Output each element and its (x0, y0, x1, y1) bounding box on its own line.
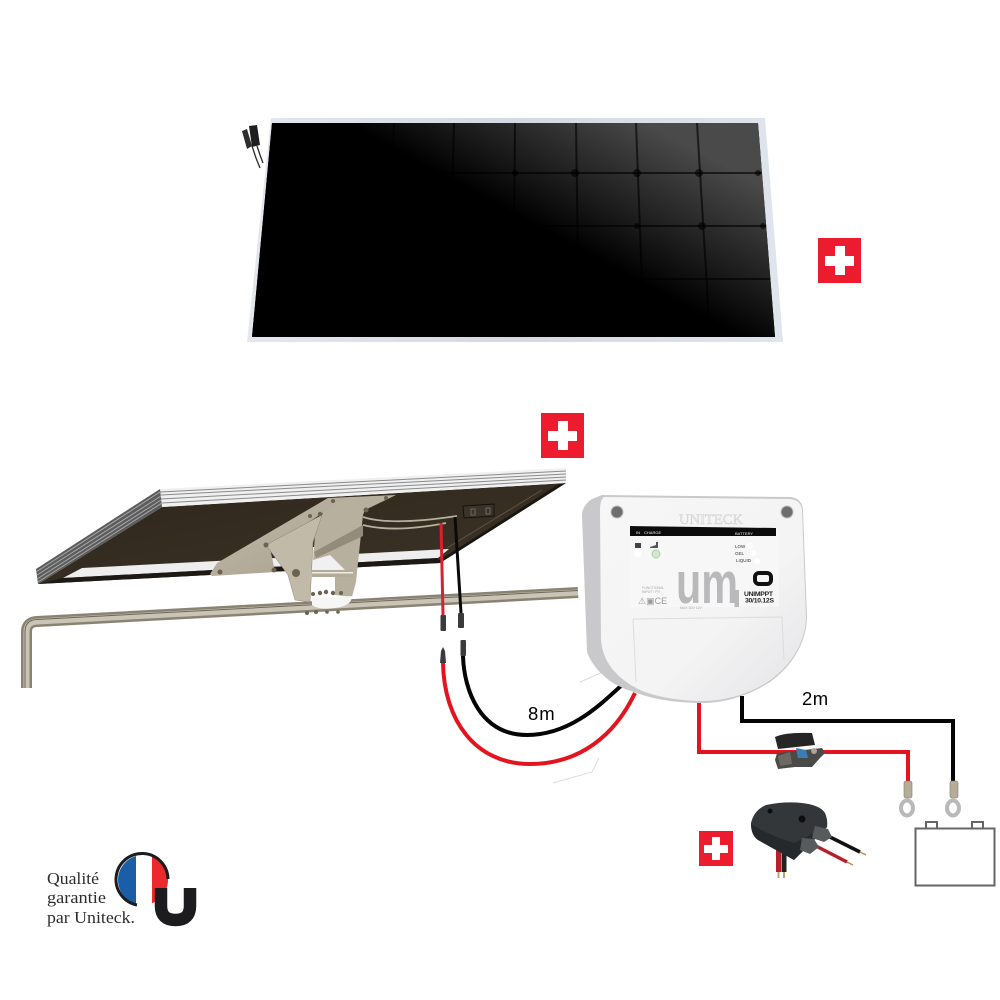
mounting rail (25, 590, 578, 688)
sensor wires, bottom (778, 850, 784, 878)
panel glass (252, 123, 775, 337)
French flag circle and U logo (116, 853, 190, 920)
sensor holes (768, 808, 806, 822)
battery type labels: GEL (735, 551, 745, 556)
sensor lower face (751, 824, 827, 860)
black battery cable (742, 696, 953, 781)
lower red cable (443, 663, 635, 764)
product name (744, 591, 774, 604)
ring terminals (901, 781, 959, 816)
lower connectors (440, 640, 466, 663)
um logo: um (676, 551, 738, 616)
inner frame line (447, 490, 542, 548)
striped side frame (36, 489, 162, 584)
Swiss cross badge: sensor (699, 831, 733, 866)
mounted panel, rear view with bracket and rail (25, 468, 578, 688)
panel rear face (38, 483, 566, 584)
8m label: 8m (528, 703, 556, 724)
red terminal (901, 781, 913, 816)
device small print: INPUT / PV (642, 590, 661, 594)
faint sketch lines (553, 672, 603, 783)
controller face (600, 497, 806, 701)
lower black cable (463, 656, 623, 735)
quality caption: par Uniteck. (47, 908, 135, 927)
battery type labels (735, 544, 752, 563)
brand name: UNITECK (679, 512, 743, 528)
quality caption: garantie (47, 888, 106, 907)
upper red wire (441, 523, 443, 615)
temperature sensor with wires (751, 802, 866, 878)
red battery cable (699, 703, 908, 781)
battery cables (699, 688, 953, 781)
product name: UNIMPPT (744, 591, 774, 598)
bracket right plate (313, 495, 396, 597)
band captions: IN (636, 530, 640, 535)
device small print: ⚠▣CE (638, 596, 667, 606)
product name: 30/10.12S (745, 598, 774, 604)
upper connectors (440, 613, 464, 631)
controller body (582, 495, 807, 703)
panel cell grid (394, 123, 770, 292)
white strip under panel (63, 549, 449, 578)
solar panel, front view (247, 118, 783, 342)
cable glands (800, 826, 832, 854)
inline fuse holder (775, 733, 825, 769)
2m label: 2m (802, 688, 829, 709)
black status band (630, 526, 776, 536)
panel wires (363, 516, 457, 529)
band captions: CHARGE (644, 530, 661, 535)
cell corner dots (512, 169, 766, 230)
band captions: BATTERY (735, 531, 753, 536)
device small print (638, 586, 703, 610)
upper black wire (455, 517, 461, 613)
rail clamp (312, 596, 352, 609)
junction box (463, 504, 494, 518)
quality caption (47, 869, 135, 927)
battery type labels: LOW (735, 544, 746, 549)
cover lid (633, 617, 784, 682)
product icon (755, 573, 771, 584)
quality label (47, 853, 190, 927)
panel right edge shadow (435, 483, 566, 563)
mounting holes (611, 506, 793, 518)
bracket diagonal shade (314, 525, 363, 558)
Swiss cross badge: panel (818, 238, 861, 283)
sensor wires, side (816, 837, 866, 865)
bracket crossbar (312, 570, 353, 577)
panel connector with cables (242, 125, 263, 168)
charge controller (582, 495, 807, 703)
battery type labels: LIQUID (736, 558, 752, 563)
label panel (630, 530, 779, 607)
striped top frame (160, 468, 566, 507)
8m cable run (440, 517, 635, 783)
black terminal (947, 781, 959, 816)
Swiss cross badge: mount (541, 413, 584, 458)
device small print: MAX 30V 12V (680, 606, 703, 610)
clamp bolts (218, 496, 388, 615)
bracket left arm (266, 515, 322, 602)
bracket opening (300, 545, 352, 572)
battery (916, 822, 994, 886)
bracket rail plate (210, 498, 345, 576)
sensor body (751, 802, 827, 860)
quality caption: Qualité (47, 869, 99, 888)
panel frame (247, 118, 783, 342)
status icons and LEDs (634, 542, 760, 564)
panel reflection (252, 123, 775, 337)
band captions (636, 530, 753, 536)
device small print: FUNCTIONAL (642, 586, 664, 590)
